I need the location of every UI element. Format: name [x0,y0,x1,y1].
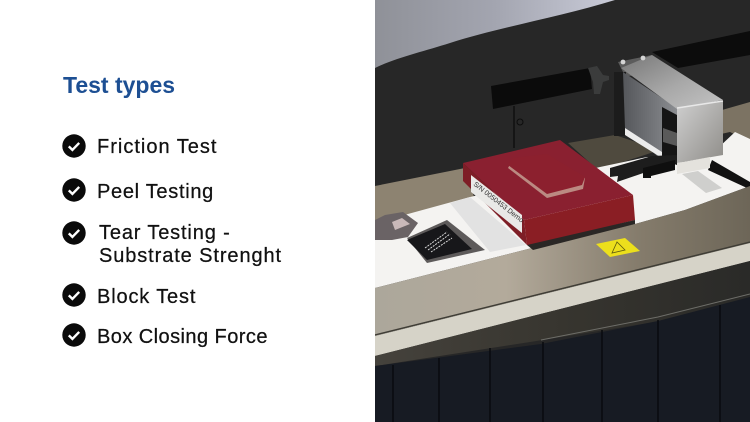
head mounting plate [618,55,680,76]
sheet print [450,197,526,252]
item: box closing force: Box Closing Force [97,326,268,348]
red sled [463,140,635,250]
black instruction card [407,220,485,263]
item: block test: Block Test [97,286,196,308]
knob [588,66,609,94]
warning sticker [596,238,640,257]
under ledge [375,261,750,366]
probe tip [643,160,675,178]
tan deck [375,168,475,225]
photo: testing machine [375,0,750,422]
ledge top [375,186,750,336]
probe arm [610,155,677,182]
wall screw [517,119,523,125]
item: block test [62,283,196,308]
clip tool [375,212,418,240]
hood curve [375,0,615,68]
red sled: S/N 0050453 Demo [472,181,525,224]
navy panels [375,297,750,422]
item: tear testing: Substrate Strenght [99,245,282,267]
head back shadow [614,72,626,136]
right slot band [652,31,750,68]
panel seams [393,305,720,422]
panel highlight [541,294,750,340]
item: friction test: Friction Test [97,136,217,158]
sensor head [621,55,723,174]
deck behind head [568,135,660,170]
black stripe on sheet [708,160,750,190]
ledge shadow edge [375,242,750,335]
checklist: test types [62,134,282,348]
back slot [491,68,592,109]
item: peel testing [62,178,214,203]
title: Test types [63,72,175,98]
deck right of head [712,102,750,142]
item: tear testing: Tear Testing - [99,222,231,244]
wall seam [513,106,515,148]
item: tear testing [62,221,282,267]
grey stripe on sheet [682,171,722,193]
light trim [375,243,750,356]
item: peel testing: Peel Testing [97,181,214,203]
dark back wall [375,0,750,422]
white test sheet [375,132,750,288]
